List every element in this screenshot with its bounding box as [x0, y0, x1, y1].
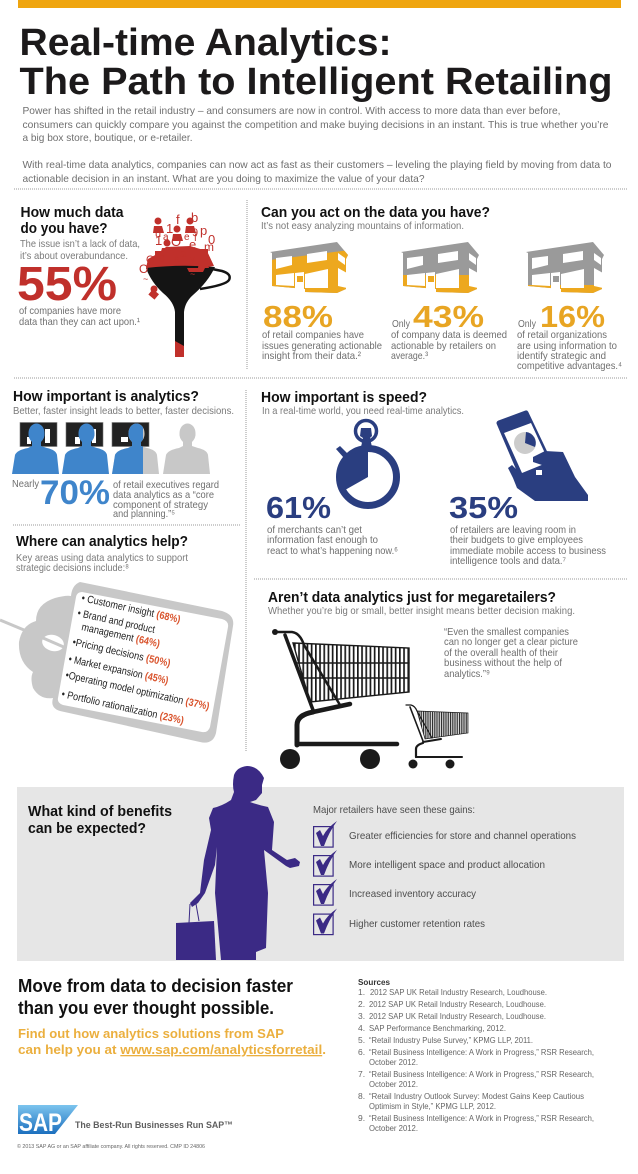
- sources: 2.: [358, 999, 365, 1009]
- stat: 35%: immediate mobile access to business: [450, 545, 606, 557]
- panel: benefits: [17, 766, 624, 961]
- sources: 8.: [358, 1091, 365, 1101]
- subheading: [20, 238, 140, 262]
- sources: Sources: [358, 977, 390, 987]
- stat: 16%: of retail organizations: [517, 329, 607, 341]
- icon: funnel with data: m: [204, 240, 214, 254]
- stat: 43%: average.³: [391, 350, 428, 362]
- intro text: With real-time data analytics, companies can now act as fast as their customers – leveling the playing field by moving from data to: [22, 159, 612, 171]
- stat: 70%: and planning.”⁵: [113, 508, 175, 520]
- icon: funnel with data: f: [194, 233, 197, 244]
- stat: 43%: of company data is deemed: [391, 329, 507, 341]
- quote: analytics.”⁹: [444, 668, 490, 680]
- icon: woman with shopping bag: [176, 766, 300, 960]
- stat: 35%: of retailers are leaving room in: [450, 524, 576, 536]
- icon: people at monitors: [12, 422, 210, 474]
- icon: funnel with data: a: [174, 254, 180, 265]
- icon: funnel with data: e: [184, 232, 190, 243]
- stat: 70%: component of strategy: [113, 499, 209, 511]
- sources: October 2012.: [369, 1079, 418, 1089]
- tag list: • Portfolio rationalization (23%): [60, 688, 185, 727]
- sources: October 2012.: [369, 1057, 418, 1067]
- sources: 2012 SAP UK Retail Industry Research, Loudhouse.: [369, 999, 546, 1009]
- stat description: of companies have more: [19, 305, 121, 317]
- heading: benefits: What kind of benefits: [28, 803, 172, 820]
- tag list: • Customer insight (68%): [80, 592, 182, 626]
- stat: 35%: 35%: [449, 490, 518, 525]
- closing headline: Move from data to decision faster: [18, 976, 293, 996]
- stat description: data than they can act upon.¹: [19, 316, 140, 328]
- icon: hand holding phone: [499, 413, 588, 501]
- top banner bar: [18, 0, 621, 8]
- title: The Path to Intelligent Retailing: [20, 61, 612, 103]
- icon: funnel with data: [139, 210, 230, 357]
- stat: 61%: of merchants can’t get: [267, 524, 362, 536]
- copyright: © 2013 SAP AG or an SAP affiliate company. All rights reserved. CMP ID 24806: [17, 1143, 205, 1150]
- stat: 61%: information fast enough to: [267, 534, 378, 546]
- icon: store 43%: [401, 242, 479, 293]
- tag list: • Brand and product: [76, 607, 156, 636]
- stat: 61%: react to what’s happening now.⁶: [267, 545, 398, 557]
- panel background: [17, 787, 624, 961]
- subheading: Better, faster insight leads to better, faster decisions.: [13, 405, 234, 417]
- sources: [358, 977, 594, 1133]
- intro text: Power has shifted in the retail industry – and consumers are now in control. With access to more data than ever before,: [22, 105, 560, 117]
- title: [20, 22, 612, 103]
- stat: 16%: Only: [518, 318, 537, 330]
- stat: 88%: issues generating actionable: [262, 340, 382, 352]
- sources: October 2012.: [369, 1123, 418, 1133]
- stat: 88%: of retail companies have: [262, 329, 364, 341]
- stat: 88%: [262, 299, 382, 362]
- sources: “Retail Business Intelligence: A Work in Progress,” RSR Research,: [369, 1047, 594, 1057]
- stat: 55%: 55%: [17, 258, 117, 311]
- stat: 43%: actionable by retailers on: [391, 340, 496, 352]
- subheading: It’s not easy analyzing mountains of information.: [261, 220, 464, 232]
- icon: funnel with data: 0: [159, 254, 165, 265]
- icon: funnel with data: b: [191, 210, 198, 225]
- gain: retention: Higher customer retention rates: [349, 918, 485, 930]
- stat: 70%: [12, 474, 219, 520]
- heading: how much data: [20, 204, 124, 237]
- panel: where can analytics help: [0, 533, 233, 743]
- panel: can you act on the data: [261, 204, 622, 372]
- icon: funnel with data: a: [163, 232, 169, 243]
- stat: 88%: 88%: [263, 299, 333, 334]
- icon: funnel with data: O: [171, 234, 181, 249]
- heading: where can analytics help: Where can analytics help?: [16, 533, 188, 550]
- icon: funnel with data: a: [180, 248, 187, 260]
- sources: 9.: [358, 1113, 365, 1123]
- sources: 1.: [358, 987, 365, 997]
- icon: store 88%: [270, 242, 348, 293]
- sources: “Retail Industry Pulse Survey,” KPMG LLP, 2011.: [369, 1035, 533, 1045]
- icon: funnel with data: O: [139, 262, 148, 276]
- heading: how much data: How much data: [20, 204, 124, 221]
- icon: funnel with data: e: [189, 237, 196, 252]
- stat: 70%: data analytics as a “core: [113, 489, 214, 501]
- call to action: [18, 1026, 326, 1057]
- subheading: [16, 552, 188, 574]
- gain: efficiencies: Greater efficiencies for store and channel operations: [349, 830, 576, 842]
- quote: can no longer get a clear picture: [444, 636, 578, 648]
- heading: analytics: How important is analytics?: [13, 388, 199, 405]
- heading: benefits: [28, 803, 172, 837]
- icon: price tag: [0, 582, 233, 743]
- stat description: [19, 305, 140, 328]
- subheading: The issue isn’t a lack of data,: [20, 238, 140, 250]
- gain: inventory accuracy: [314, 879, 477, 905]
- heading: speed: How important is speed?: [261, 389, 427, 406]
- tag list: •Pricing decisions (50%): [71, 636, 172, 670]
- panel: how important is speed: [261, 389, 606, 567]
- icon: funnel with data: f: [176, 212, 180, 227]
- sources: 7.: [358, 1069, 365, 1079]
- tag list: •Operating model optimization (37%): [64, 669, 210, 713]
- stat: 43%: [391, 299, 507, 362]
- gain: retention: [314, 908, 485, 935]
- heading: benefits: can be expected?: [28, 820, 146, 837]
- stat: 61%: [266, 490, 398, 557]
- icon: funnel with data: 1: [155, 233, 162, 248]
- stat: 16%: 16%: [540, 299, 605, 334]
- gain: space allocation: More intelligent space and product allocation: [349, 859, 545, 871]
- icon: large shopping cart: [272, 629, 409, 769]
- tag list: [60, 592, 210, 727]
- icon: funnel with data: y: [190, 254, 195, 265]
- gain: efficiencies: [314, 821, 576, 847]
- sources: “Retail Business Intelligence: A Work in Progress,” RSR Research,: [369, 1069, 594, 1079]
- sources: “Retail Business Intelligence: A Work in Progress,” RSR Research,: [369, 1113, 594, 1123]
- gains intro: Major retailers have seen these gains:: [313, 804, 475, 816]
- sources: SAP Performance Benchmarking, 2012.: [369, 1023, 506, 1033]
- stat: 16%: competitive advantages.⁴: [517, 360, 622, 372]
- stat: 16%: identify strategic and: [517, 350, 606, 362]
- heading: can you act: Can you act on the data you have?: [261, 204, 490, 221]
- sources: “Retail Industry Outlook Survey: Modest Gains Keep Cautious: [369, 1091, 584, 1101]
- intro text: a big box store, boutique, or e-retailer.: [22, 132, 192, 144]
- subheading: Whether you’re big or small, better insight means better decision making.: [268, 605, 575, 617]
- logo: SAP: SAP: [19, 1109, 62, 1137]
- stat: 61%: 61%: [266, 490, 331, 525]
- quote: [444, 626, 578, 680]
- icon: funnel with data: O: [146, 254, 155, 266]
- sources: 5.: [358, 1035, 365, 1045]
- stat: 16%: [517, 299, 622, 372]
- closing headline: [18, 976, 293, 1018]
- title: Real-time Analytics:: [20, 22, 392, 64]
- stat: 70%: of retail executives regard: [113, 479, 219, 491]
- icon: funnel with data: 9: [192, 227, 198, 239]
- heading: megaretailers: Aren’t data analytics just for megaretailers?: [268, 589, 556, 606]
- icon: small shopping cart: [406, 705, 468, 768]
- intro text: actionable decision in an instant. What are you doing to maximize the value of your data?: [22, 173, 425, 185]
- quote: “Even the smallest companies: [444, 626, 569, 638]
- panel: how much data: [17, 204, 230, 357]
- stat: 43%: Only: [392, 318, 411, 330]
- call to action: can help you at www.sap.com/analyticsforretail .: [18, 1042, 326, 1057]
- panel: how important is analytics: [12, 388, 234, 520]
- quote: business without the help of: [444, 657, 562, 669]
- stat: 70%: Nearly: [12, 478, 40, 490]
- tag list: • Market expansion (45%): [67, 653, 170, 687]
- icon: stopwatch: [336, 420, 396, 506]
- icon: store 16%: [526, 242, 604, 293]
- icon: funnel with data: 0: [208, 232, 215, 247]
- icon: funnel with data: ~: [190, 269, 195, 279]
- stat: 16%: are using information to: [517, 340, 617, 352]
- call to action: Find out how analytics solutions from SAP: [18, 1026, 284, 1041]
- stat: 70%: 70%: [40, 474, 110, 512]
- panel: megaretailers: [268, 589, 578, 769]
- subheading: In a real-time world, you need real-time analytics.: [262, 405, 464, 417]
- subheading: it’s about overabundance.: [20, 250, 128, 262]
- stat: 35%: [449, 490, 606, 567]
- gain: inventory accuracy: Increased inventory accuracy: [349, 888, 477, 900]
- intro text: [22, 105, 612, 185]
- heading: how much data: do you have?: [20, 220, 108, 237]
- gain: space allocation: [314, 850, 545, 876]
- icon: funnel with data: ~: [143, 274, 148, 284]
- stat: 35%: their budgets to give employees: [450, 534, 583, 546]
- sources: 6.: [358, 1047, 365, 1057]
- stat: 43%: 43%: [413, 299, 484, 334]
- sources: 4.: [358, 1023, 365, 1033]
- sources: 3.: [358, 1011, 365, 1021]
- subheading: Key areas using data analytics to support: [16, 552, 188, 564]
- tag list: management (64%): [80, 621, 161, 650]
- stat: 35%: intelligence tools and data.⁷: [450, 555, 566, 567]
- icon: funnel with data: 1: [166, 221, 173, 236]
- icon: funnel with data: p: [200, 223, 207, 238]
- intro text: consumers can quickly compare you against the competition and make buying decisions in an instant. This is true whether you’re: [22, 119, 609, 131]
- sources: 2012 SAP UK Retail Industry Research, Loudhouse.: [369, 1011, 546, 1021]
- tagline: The Best-Run Businesses Run SAP™: [75, 1120, 233, 1131]
- quote: of the overall health of their: [444, 647, 558, 659]
- sources: 2012 SAP UK Retail Industry Research, Loudhouse.: [370, 987, 547, 997]
- closing headline: than you ever thought possible.: [18, 998, 274, 1018]
- subheading: strategic decisions include:⁸: [16, 562, 129, 574]
- sources: Optimism in Style,” KPMG LLP, 2012.: [369, 1101, 496, 1111]
- stat: 88%: insight from their data.²: [262, 350, 361, 362]
- icon: funnel with data: u: [155, 228, 161, 240]
